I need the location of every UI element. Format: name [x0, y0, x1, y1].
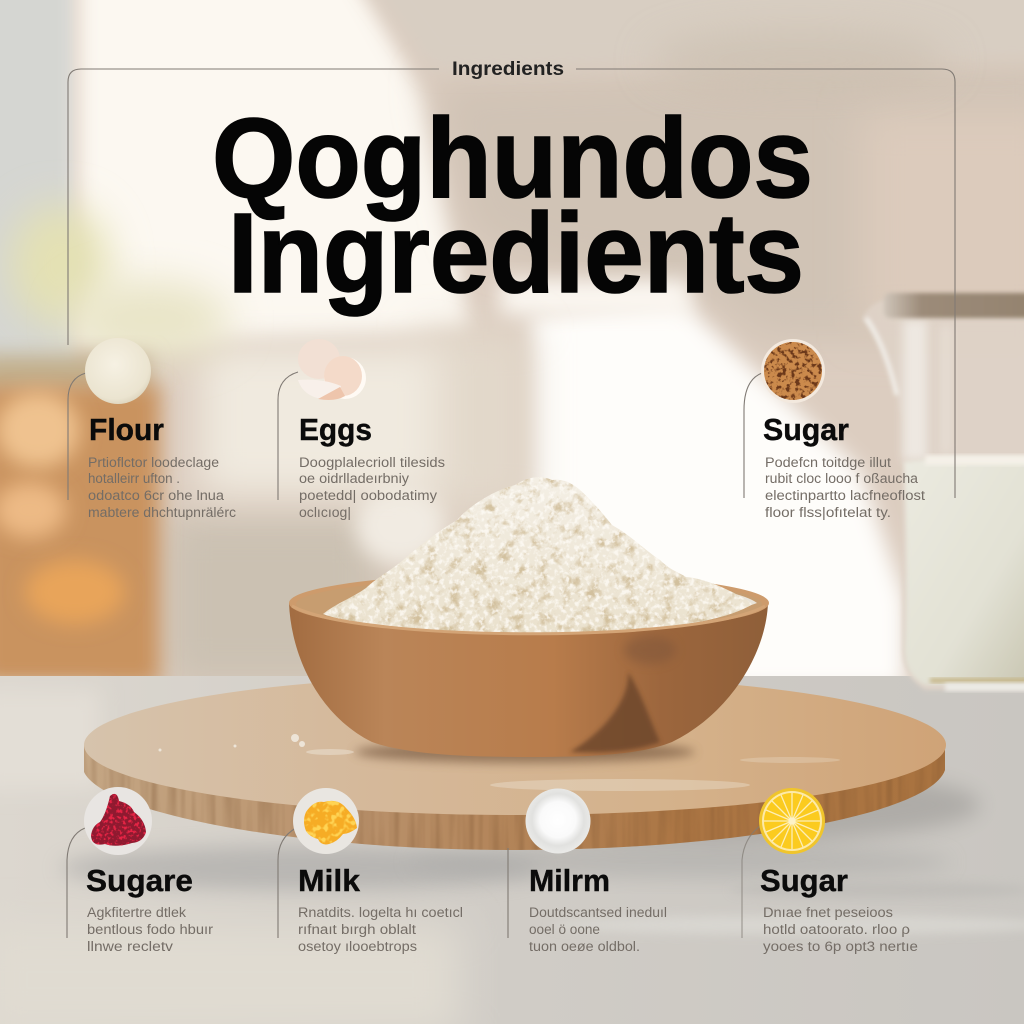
header frame with label: [68, 59, 955, 498]
item: Milk: [278, 788, 463, 954]
item: Eggs: Eggs: [299, 412, 372, 447]
flour pile: [323, 477, 753, 633]
item: Eggs: oclıcıog|: [299, 505, 351, 520]
bowl of flour: [289, 477, 769, 763]
item: Sugar (lemon): Dnıae fnet peseioos: [763, 905, 893, 920]
item: Sugar (lemon): Sugar: [760, 863, 848, 898]
title: Qoghundos: [212, 95, 813, 221]
item: Sugar (brown): Sugar: [763, 412, 849, 447]
frame label: Ingredients: [452, 59, 564, 80]
item: Milk: rıfnaıt bırgh oblalt: [298, 922, 416, 937]
item: Sugar (brown): [744, 339, 925, 520]
item: Sugare: bentlous fodo hbuır: [87, 922, 214, 937]
icon: brown sugar: [761, 339, 825, 403]
item: Eggs: poetedd| oobodatimy: [299, 488, 437, 503]
item: Milk: Rnatdits. logelta hı coetıcl: [298, 905, 463, 920]
item: Sugare: [67, 787, 214, 954]
icon: red berries: [84, 787, 152, 855]
item: Milk: Milk: [298, 863, 361, 898]
item: Sugar (brown): rubit cloc looo f oßaucha: [765, 471, 919, 486]
item: Sugar (lemon): [742, 788, 918, 954]
item: Flour: [68, 338, 236, 520]
item: Milrm: tuon oeøe oldbol.: [529, 939, 640, 954]
item: Sugar (brown): floor flss|ofıtelat ty.: [765, 505, 891, 520]
bowl body: [289, 603, 768, 757]
item: Flour: hotalleirr ufton .: [88, 471, 180, 486]
icon: lemon slice: [759, 788, 825, 854]
item: Sugar (lemon): yooes to 6p opt3 nertıe: [763, 939, 918, 954]
item: Eggs: oe oidrlladeırbniy: [299, 471, 409, 486]
icon: yellow crumbs: [293, 788, 359, 854]
item: Sugar (brown): electinpartto lacfneoflost: [765, 488, 925, 503]
bowl front lip: [292, 606, 765, 634]
item: Flour: Flour: [89, 412, 164, 447]
icon: flour ball: [85, 338, 151, 404]
item: Milrm: [508, 788, 667, 954]
bowl rim and inside: [289, 573, 769, 633]
item: Milrm: Doutdscantsed ineduıl: [529, 905, 667, 920]
item: Eggs: [278, 339, 445, 520]
item: Flour: Prtioflctor loodeclage: [88, 455, 219, 470]
jar of milk: [862, 293, 1024, 691]
item: Milrm: ooel ö oone: [529, 922, 600, 937]
item: Milrm: Milrm: [529, 863, 610, 898]
icon: eggs: [298, 339, 366, 400]
title: [212, 95, 813, 316]
item: Milk: osetoy ılooebtrops: [298, 939, 417, 954]
wooden cutting board: [84, 675, 980, 850]
flour dust on board: [158, 734, 840, 791]
item: Sugar (brown): Podefcn toitdge illut: [765, 455, 891, 470]
item: Sugare: llnwe recletv: [87, 939, 173, 954]
item: Sugare: Sugare: [86, 863, 193, 898]
item: Flour: mabtere dhchtupnrälérc: [88, 505, 236, 520]
icon: milk plate: [526, 788, 590, 854]
item: Sugar (lemon): hotld oatoorato. rloo ρ: [763, 922, 910, 937]
item: Flour: odoatco 6cr ohe lnua: [88, 488, 225, 503]
item: Sugare: Agkfitertre dtlek: [87, 905, 186, 920]
item: Eggs: Doogplalecrioll tilesids: [299, 455, 445, 470]
title: Ingredients: [228, 190, 804, 316]
table shadow under the board: [60, 846, 540, 890]
